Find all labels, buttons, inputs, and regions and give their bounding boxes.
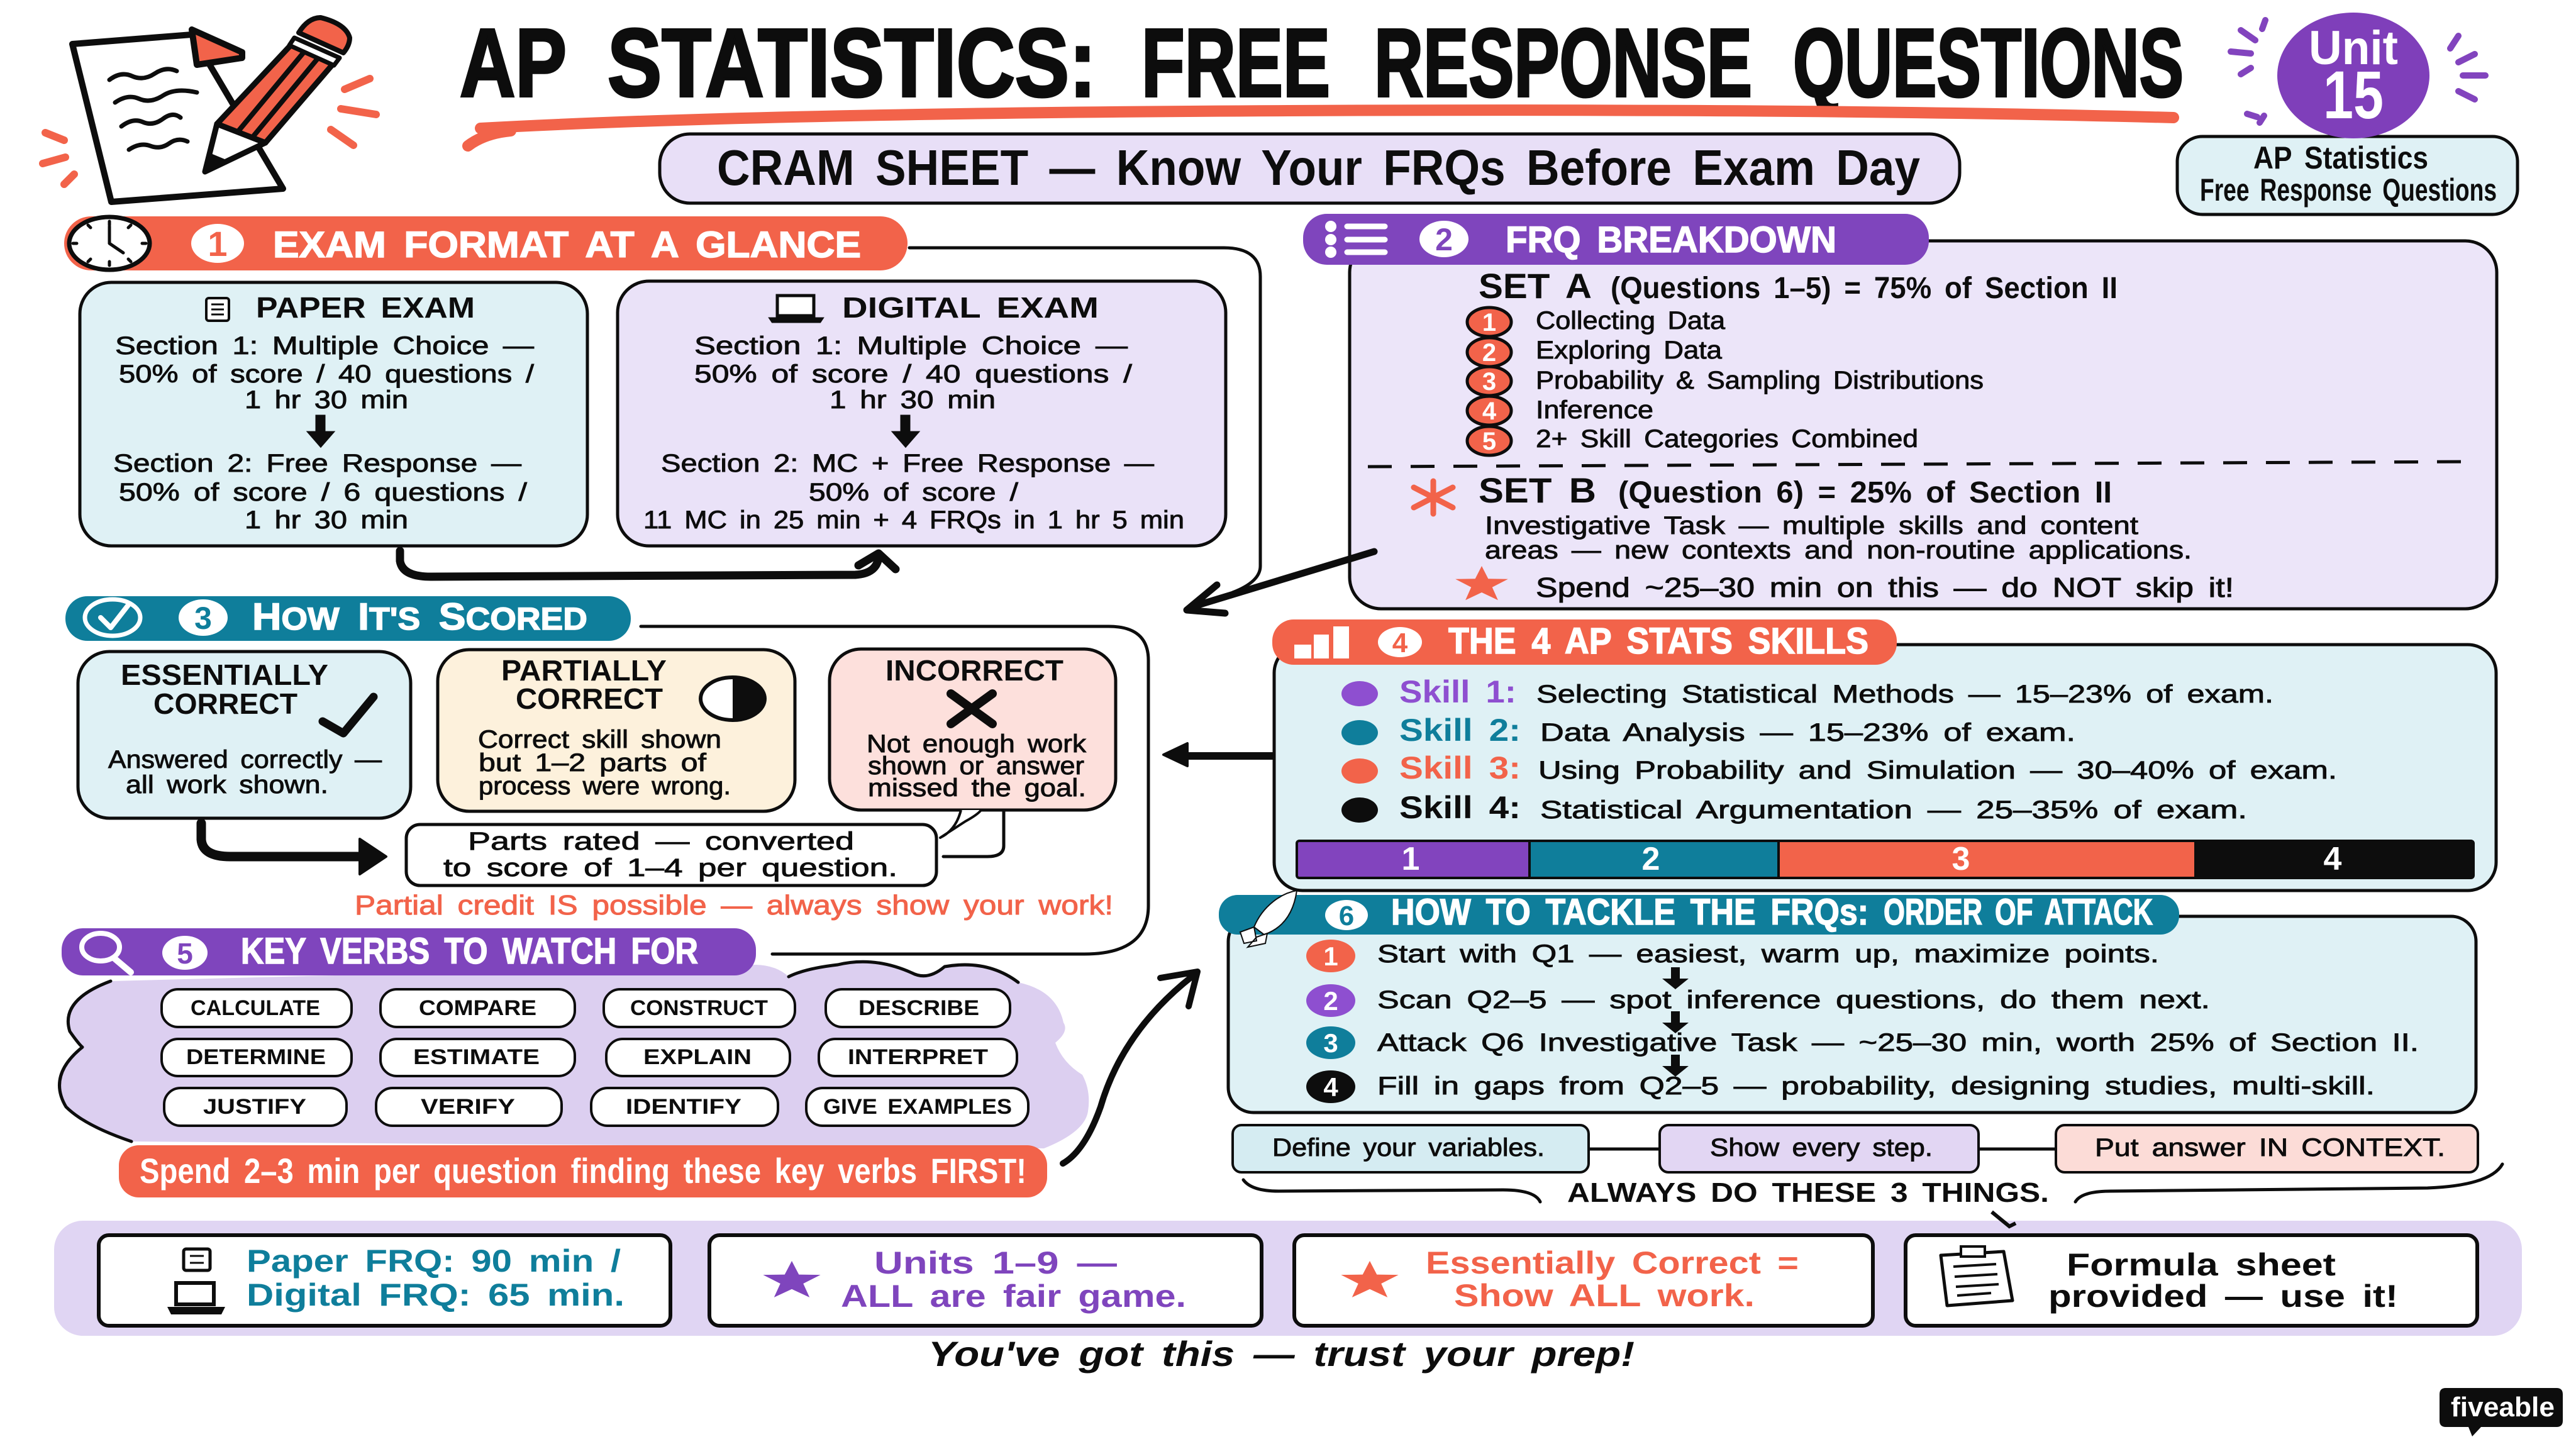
panel: order of attack: Start with Q1 — easiest, warm up, maximize points.	[1377, 940, 2159, 968]
arrow: down	[308, 416, 333, 447]
brace: always do these 3 things: ALWAYS DO THESE 3 THINGS.	[1567, 1177, 2049, 1208]
card: incorrect	[830, 649, 1116, 810]
stacked bar chart: 3	[1952, 841, 1970, 877]
section 3 heading	[65, 596, 631, 641]
panel: digital exam	[618, 281, 1226, 546]
three things: boxes: Put answer IN CONTEXT.	[2095, 1134, 2445, 1162]
bottom band	[54, 1212, 2522, 1336]
section 2 heading	[1303, 214, 1929, 265]
panel: order of attack	[1228, 916, 2476, 1113]
key verb banner: Spend 2–3 min per question finding these key verbs FIRST!	[140, 1151, 1026, 1191]
panel: digital exam: 1 hr 30 min	[830, 386, 996, 414]
panel: AP stats skills: Skill 1:	[1399, 674, 1516, 709]
panel: paper exam: Section 1: Multiple Choice —	[115, 332, 534, 360]
section 6 heading: 6	[1339, 901, 1354, 931]
title: STATISTICS:	[608, 9, 1096, 117]
fiveable logo	[2440, 1388, 2563, 1436]
card: units: Units 1–9 —	[874, 1245, 1117, 1280]
panel: AP stats skills: Statistical Argumentation — 25–35% of exam.	[1540, 796, 2247, 824]
icon: laptop	[167, 1283, 225, 1314]
card: timing: Digital FRQ: 65 min.	[247, 1277, 625, 1313]
panel: paper exam	[80, 282, 587, 546]
panel: digital exam: 50% of score / 40 questions /	[694, 360, 1133, 388]
icon: half circle	[701, 677, 765, 720]
panel: digital exam: 50% of score /	[809, 479, 1019, 506]
callout: parts rated	[406, 810, 1004, 886]
card: essentially correct reminder: Show ALL work.	[1454, 1278, 1755, 1313]
card: essentially correct reminder	[1294, 1235, 1873, 1326]
icon: rocket	[1240, 891, 1297, 947]
verb pills: IDENTIFY	[626, 1095, 741, 1119]
panel: AP stats skills: Data Analysis — 15–23% of exam.	[1540, 719, 2075, 747]
card: essentially correct: Answered correctly —	[108, 746, 382, 774]
numbered list: set A: 2+ Skill Categories Combined	[1536, 425, 1918, 453]
closing line: You've got this — trust your prep!	[928, 1334, 1635, 1374]
section 5 heading: KEY VERBS TO WATCH FOR	[241, 931, 698, 972]
section 5 heading	[62, 928, 756, 975]
section 1 heading: EXAM FORMAT AT A GLANCE	[273, 225, 861, 265]
panel: FRQ breakdown: Spend ~25–30 min on this — do NOT skip it!	[1536, 572, 2234, 603]
stacked bar chart	[1297, 841, 2473, 878]
card: partially correct: CORRECT	[516, 682, 663, 715]
title: AP	[460, 9, 567, 117]
numbered list: set A: Collecting Data	[1536, 307, 1726, 335]
section 4 heading	[1272, 619, 1897, 665]
arrow: set B to section 3	[1187, 552, 1374, 613]
verb pills: EXPLAIN	[643, 1045, 752, 1069]
arrow: key verbs to section 6	[1063, 972, 1197, 1163]
fiveable logo: fiveable	[2451, 1392, 2555, 1423]
card: incorrect: INCORRECT	[886, 654, 1063, 687]
panel: AP stats skills	[1274, 645, 2496, 891]
verb pills	[162, 989, 1028, 1126]
title: FREE	[1141, 9, 1330, 117]
card: essentially correct: CORRECT	[153, 687, 297, 720]
panel: paper exam: Section 2: Free Response —	[113, 450, 521, 477]
key verb banner	[119, 1145, 1047, 1197]
stacked bar chart: 2	[1642, 841, 1660, 877]
panel: FRQ breakdown: (Question 6) = 25% of Section II	[1618, 476, 2112, 509]
verb pills: VERIFY	[421, 1095, 515, 1119]
card: formula sheet: provided — use it!	[2048, 1279, 2398, 1314]
arrow: section 1 to section 3 connector	[909, 248, 1260, 592]
verb pills: CALCULATE	[191, 996, 320, 1020]
arrows: step flow	[1662, 967, 1689, 1077]
numbered list: set A: Probability & Sampling Distributions	[1536, 367, 1984, 394]
verb pills: INTERPRET	[848, 1045, 988, 1069]
card: partially correct	[438, 650, 795, 811]
icon: scroll	[184, 1249, 210, 1270]
verb pills: COMPARE	[419, 996, 536, 1020]
card: partially correct: PARTIALLY	[501, 654, 667, 687]
numbered list: set A: Exploring Data	[1536, 336, 1723, 364]
numbered list: set A: Inference	[1536, 396, 1653, 424]
numbered list: set A: 1	[1482, 309, 1496, 336]
title: RESPONSE	[1374, 9, 1752, 117]
three things: boxes: Define your variables.	[1272, 1134, 1545, 1162]
numbered list: set A: 2	[1482, 339, 1496, 367]
three things: boxes	[1233, 1125, 2478, 1172]
panel: FRQ breakdown: areas — new contexts and non-routine applications.	[1485, 536, 2192, 564]
section 3 heading: HOW IT'S SCORED	[252, 596, 587, 638]
subtitle banner: CRAM SHEET — Know Your FRQs Before Exam Day	[717, 140, 1920, 196]
card: essentially correct reminder: Essentially Correct =	[1426, 1245, 1799, 1280]
icon: check mark	[323, 697, 374, 733]
panel: digital exam: 11 MC in 25 min + 4 FRQs in 1 hr 5 min	[643, 506, 1184, 534]
title underline	[468, 110, 2174, 146]
panel: paper exam: 50% of score / 6 questions /	[119, 479, 528, 506]
panel: paper exam: PAPER EXAM	[256, 291, 475, 324]
card: timing: Paper FRQ: 90 min /	[247, 1243, 621, 1279]
verb pills: GIVE EXAMPLES	[823, 1095, 1012, 1119]
icon: laptop	[770, 296, 823, 322]
unit badge: AP Statistics	[2253, 140, 2428, 175]
title: QUESTIONS	[1793, 9, 2184, 117]
cloud: key verbs	[60, 962, 1089, 1148]
card: units	[709, 1235, 1262, 1326]
arrow: down	[893, 416, 918, 447]
panel: paper exam: 1 hr 30 min	[245, 386, 408, 414]
section 6 heading: HOW TO TACKLE THE FRQs:	[1391, 892, 1868, 933]
verb pills: CONSTRUCT	[630, 996, 768, 1020]
numbered list: set A: 5	[1482, 428, 1496, 455]
unit badge	[2177, 13, 2518, 214]
section 3 heading: 3	[194, 601, 212, 636]
panel: AP stats skills: Skill 3:	[1399, 750, 1521, 786]
title	[460, 9, 2184, 117]
arrow: section 4 to section 3	[1163, 743, 1274, 766]
panel: order of attack: 3	[1323, 1028, 1338, 1058]
icon: paper and pencil	[43, 18, 376, 202]
numbered list: set A	[1467, 307, 1984, 455]
numbered list: set A: 3	[1482, 368, 1496, 396]
section 6 heading	[1219, 891, 2179, 947]
card: essentially correct: ESSENTIALLY	[121, 658, 328, 691]
card: incorrect: Not enough work	[867, 730, 1087, 758]
panel: AP stats skills: Skill 2:	[1399, 713, 1521, 748]
icon: asterisk	[1414, 481, 1453, 514]
brace: always do these 3 things	[1243, 1164, 2502, 1208]
icon: star	[1455, 566, 1508, 600]
card: partially correct: process were wrong.	[479, 772, 731, 800]
callout: parts rated: Parts rated — converted	[468, 828, 854, 855]
section 6 heading: ORDER OF ATTACK	[1884, 892, 2153, 933]
icon: X mark	[951, 694, 992, 724]
card: incorrect: shown or answer	[868, 752, 1084, 780]
section 1 heading	[64, 216, 908, 270]
three things: boxes: Show every step.	[1710, 1134, 1933, 1162]
panel: order of attack: Fill in gaps from Q2–5 — probability, designing studies, multi-skill.	[1377, 1072, 2375, 1100]
verb pills: DESCRIBE	[858, 996, 979, 1020]
card: essentially correct: all work shown.	[126, 771, 328, 799]
card: units: ALL are fair game.	[841, 1279, 1186, 1314]
section 2 heading: 2	[1435, 222, 1453, 257]
panel: FRQ breakdown	[1350, 241, 2497, 609]
unit badge: Unit	[2309, 21, 2398, 75]
stacked bar chart: 4	[2324, 841, 2342, 877]
callout: parts rated: to score of 1–4 per question.	[443, 854, 897, 882]
icon: scroll	[206, 298, 229, 321]
arrow: paper to digital	[400, 551, 896, 577]
partial credit note: Partial credit IS possible — always show your work!	[355, 890, 1113, 921]
section 5 heading: 5	[177, 937, 193, 970]
panel: FRQ breakdown: SET B	[1479, 470, 1596, 510]
panel: order of attack: Scan Q2–5 — spot inference questions, do them next.	[1377, 986, 2210, 1014]
card: formula sheet	[1906, 1235, 2477, 1326]
panel: AP stats skills: Skill 4:	[1399, 790, 1521, 825]
panel: digital exam: Section 1: Multiple Choice —	[694, 332, 1128, 360]
panel: paper exam: 1 hr 30 min	[245, 506, 408, 534]
card: partially correct: Correct skill shown	[478, 726, 721, 753]
panel: order of attack: Attack Q6 Investigative Task — ~25–30 min, worth 25% of Section II.	[1377, 1029, 2419, 1057]
panel: FRQ breakdown: SET A	[1479, 266, 1592, 306]
card: timing	[99, 1235, 670, 1326]
panel: digital exam: DIGITAL EXAM	[842, 291, 1099, 324]
panel: order of attack: 2	[1323, 986, 1338, 1016]
panel: AP stats skills: Using Probability and Simulation — 30–40% of exam.	[1538, 757, 2337, 784]
verb pills: DETERMINE	[186, 1045, 326, 1069]
icon: clipboard	[1941, 1246, 2012, 1306]
section 4 heading: THE 4 AP STATS SKILLS	[1448, 621, 1868, 662]
section 1 heading: 1	[208, 224, 228, 264]
numbered list: set A: 4	[1482, 397, 1497, 425]
card: essentially correct	[78, 652, 411, 818]
panel: order of attack: 1	[1323, 941, 1338, 971]
section 2 heading: FRQ BREAKDOWN	[1506, 219, 1836, 260]
panel: AP stats skills: Selecting Statistical Methods — 15–23% of exam.	[1536, 680, 2273, 708]
stacked bar chart: 1	[1402, 841, 1419, 877]
section 4 heading: 4	[1392, 628, 1408, 658]
card: formula sheet: Formula sheet	[2067, 1247, 2336, 1282]
verb pills: JUSTIFY	[203, 1095, 306, 1119]
card: partially correct: but 1–2 parts of	[479, 749, 707, 777]
arrow: scored to parts rated	[201, 823, 386, 874]
panel: digital exam: Section 2: MC + Free Response —	[661, 450, 1154, 477]
unit badge: 15	[2323, 57, 2384, 133]
verb pills: ESTIMATE	[413, 1045, 540, 1069]
section 3 outline connector	[641, 626, 1148, 954]
panel: FRQ breakdown: Investigative Task — multiple skills and content	[1485, 512, 2138, 540]
card: incorrect: missed the goal.	[868, 774, 1086, 802]
panel: FRQ breakdown: (Questions 1–5) = 75% of Section II	[1611, 272, 2118, 305]
panel: order of attack: 4	[1323, 1072, 1338, 1102]
panel: paper exam: 50% of score / 40 questions /	[119, 360, 535, 388]
